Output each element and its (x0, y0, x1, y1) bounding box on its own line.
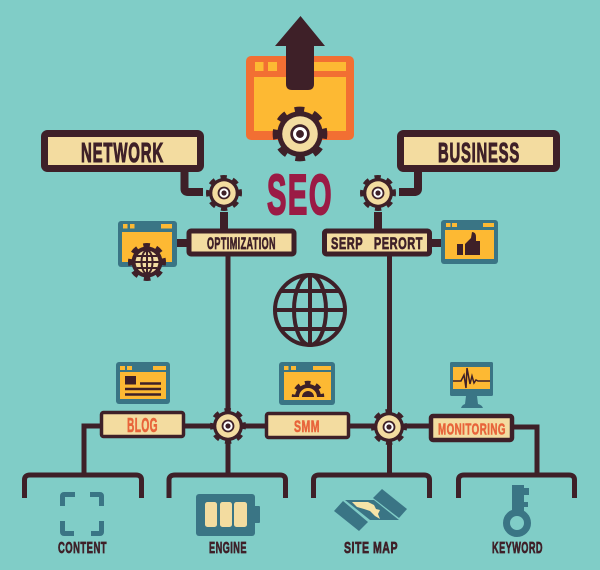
label: network: NETWORK (81, 137, 164, 168)
label: optimization: OPTIMIZATION (207, 234, 276, 253)
icon: upload window with arrow and gear (246, 16, 354, 158)
label: blog: BLOG (127, 415, 158, 437)
connector lines (84, 170, 537, 475)
icon: content frame (62, 494, 102, 534)
icon: right junction gear (374, 412, 404, 442)
label: monitoring: MONITORING (438, 422, 506, 438)
label: optimization (189, 231, 294, 254)
title: SEO: SEO (267, 163, 333, 227)
icon: key (506, 485, 529, 534)
label: serp perort (324, 231, 430, 254)
icon: business gear (362, 178, 394, 208)
label: keyword: KEYWORD (492, 540, 543, 557)
icon: globe (275, 275, 345, 345)
icon: monitor (450, 362, 493, 408)
icon: left junction gear (212, 410, 244, 442)
label: site map: SITE MAP (344, 540, 398, 557)
icon: blog window (116, 362, 170, 404)
icon: serp window with thumbs up (441, 220, 498, 264)
label: monitoring (431, 416, 512, 440)
label: smm (266, 414, 348, 438)
icon: smm window (279, 362, 335, 405)
label: business (400, 134, 556, 168)
icon: site map (334, 489, 407, 531)
label: content: CONTENT (58, 540, 107, 557)
icon: network gear (208, 178, 240, 208)
label: blog (102, 412, 184, 437)
label: business: BUSINESS (438, 137, 520, 168)
brackets (24, 475, 574, 498)
icon: optimization window with globe gear (118, 221, 177, 278)
label: serp perort: SERP PERORT (331, 234, 423, 253)
icon: battery engine (196, 494, 260, 536)
label: smm: SMM (294, 417, 320, 436)
label: engine: ENGINE (209, 540, 247, 557)
label: network (44, 134, 200, 168)
